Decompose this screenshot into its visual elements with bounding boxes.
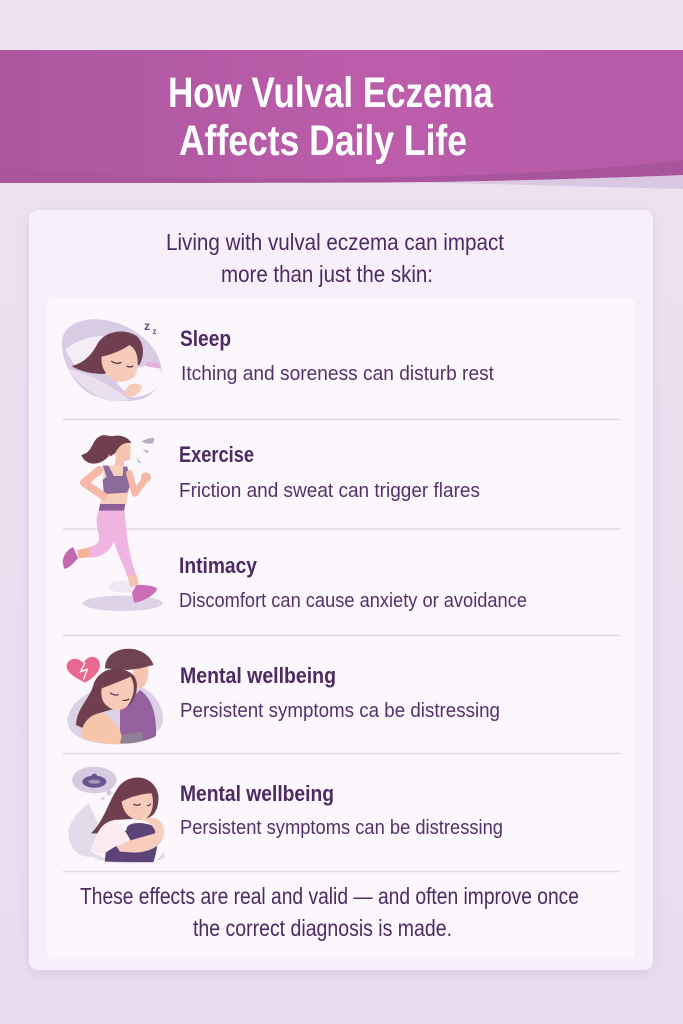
description: Exercise: Friction and sweat can trigger flares [179,480,480,502]
intro text: Living with vulval eczema can impact [166,229,505,255]
title: How Vulval Eczema [168,69,494,117]
icon: sleeping woman [62,319,162,402]
title: Affects Daily Life [179,117,467,165]
heading: Exercise: Exercise [179,442,254,467]
inner panel [47,298,635,959]
icon: woman hugging knees with thought cloud [68,767,165,863]
heading: Mental wellbeing (first): Mental wellbeing [180,663,336,688]
closing statement [80,883,579,941]
title [168,69,494,165]
heading: Mental wellbeing (second): Mental wellbeing [180,781,334,806]
icon: sleeping woman: z [144,319,150,333]
intro text [166,229,505,287]
icon: woman running [63,435,163,611]
closing statement: These effects are real and valid — and often improve once [80,883,579,909]
heading: Sleep: Sleep [180,326,231,351]
icon: sleeping woman: z [153,327,157,336]
icon: couple embracing with broken heart [67,649,163,744]
description: Sleep: Itching and soreness can disturb rest [181,363,494,385]
closing statement: the correct diagnosis is made. [193,915,452,941]
heading: Intimacy: Intimacy [179,553,258,578]
description: Intimacy: Discomfort can cause anxiety or avoidance [179,590,527,612]
intro text: more than just the skin: [221,261,433,287]
header banner [0,50,683,189]
description: Mental wellbeing (first): Persistent symptoms ca be distressing [180,700,500,722]
description: Mental wellbeing (second): Persistent symptoms can be distressing [180,817,503,839]
outer card [29,210,653,970]
